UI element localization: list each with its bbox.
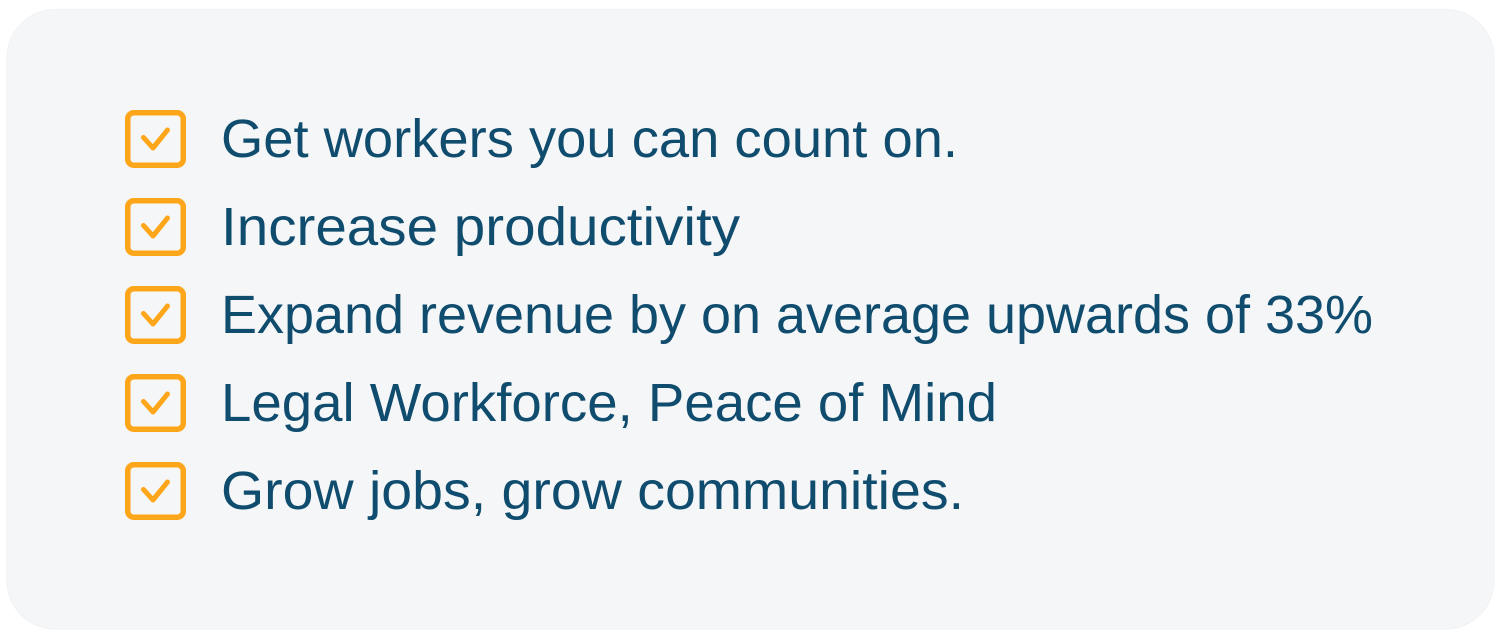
icon: checkbox 4	[128, 377, 183, 429]
text: item 1: Get workers you can count on.	[221, 109, 958, 169]
text: item 2: Increase productivity	[221, 197, 740, 257]
text: item 4: Legal Workforce, Peace of Mind	[221, 373, 997, 433]
item 1	[128, 109, 958, 169]
icon: checkbox 3	[128, 289, 183, 341]
item 2	[128, 197, 740, 257]
text: item 5: Grow jobs, grow communities.	[221, 461, 964, 521]
icon: checkbox 5	[128, 465, 183, 517]
icon: checkbox 1	[128, 113, 183, 165]
checklist	[128, 109, 1373, 521]
item 5	[128, 461, 964, 521]
item 4	[128, 373, 997, 433]
icon: checkbox 2	[128, 201, 183, 253]
item 3	[128, 285, 1373, 345]
text: item 3: Expand revenue by on average upwards of 33%	[221, 285, 1373, 345]
